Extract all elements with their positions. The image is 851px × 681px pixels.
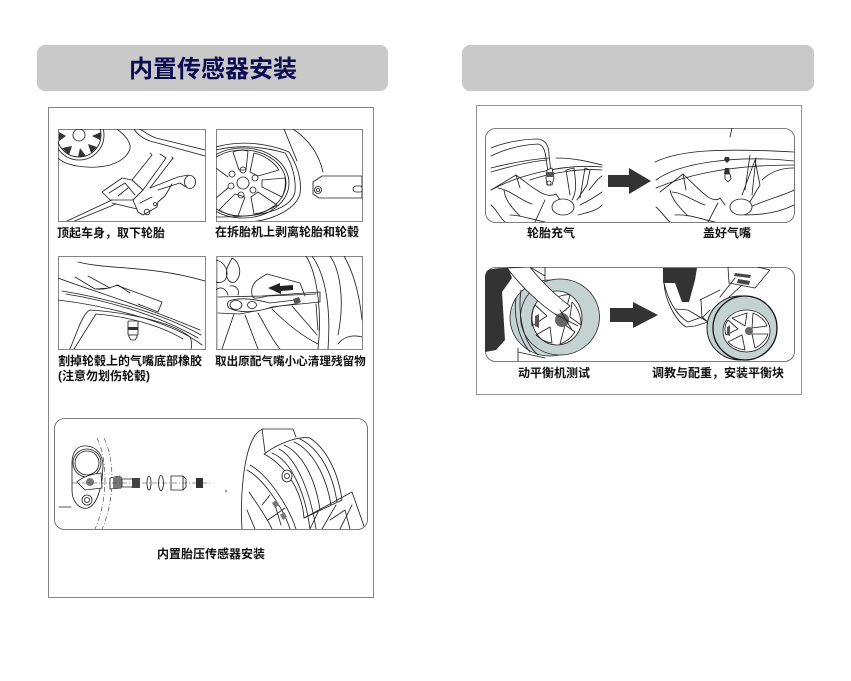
arrow: inflate to cap xyxy=(608,168,651,194)
panel: right inflation and balancing xyxy=(476,106,802,394)
caption: inflate tyre: 轮胎充气 xyxy=(527,225,575,240)
header: right blank bar xyxy=(462,45,814,91)
panel: left installation steps xyxy=(48,108,374,598)
arrow: test to balance xyxy=(610,302,658,328)
caption: step 2: 在拆胎机上剥离轮胎和轮毂 xyxy=(215,224,359,239)
illustration: jack lifting car xyxy=(58,129,206,222)
caption: step 3: 割掉轮毂上的气嘴底部橡胶 xyxy=(58,353,202,368)
illustration: sensor assembly exploded view xyxy=(54,418,368,530)
caption: step 4: 取出原配气嘴小心清理残留物 xyxy=(215,354,366,368)
caption: step 3: (注意勿划伤轮毂) xyxy=(58,368,150,383)
caption: sensor installation: 内置胎压传感器安装 xyxy=(157,546,265,561)
illustration: tyre changer xyxy=(216,129,363,222)
caption: step 3 xyxy=(58,353,202,383)
illustration: inflate and cap row xyxy=(486,128,794,222)
header: left title bar xyxy=(37,45,388,91)
illustration: cutting valve rubber xyxy=(58,256,206,350)
illustration: removing the valve xyxy=(216,256,362,350)
illustration: balancing row xyxy=(485,265,794,362)
caption: fit valve cap: 盖好气嘴 xyxy=(703,225,751,240)
caption: dynamic balancer test: 动平衡机测试 xyxy=(518,365,590,380)
caption: adjust and fit weights: 调教与配重，安装平衡块 xyxy=(652,365,784,380)
title: 内置传感器安装 xyxy=(129,55,297,83)
caption: step 1: 顶起车身，取下轮胎 xyxy=(57,225,165,240)
